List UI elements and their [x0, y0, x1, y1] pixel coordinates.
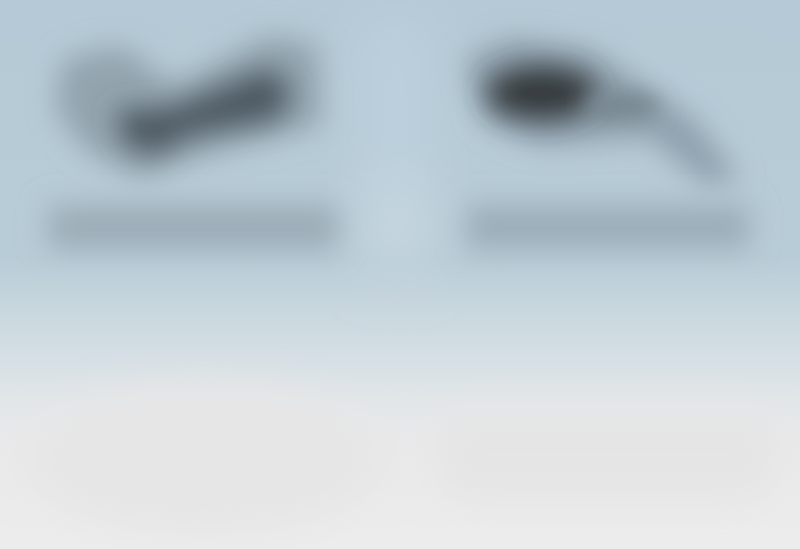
- left shape core: [115, 68, 292, 155]
- left shape halo: [55, 35, 322, 178]
- left dark shape: [55, 35, 322, 178]
- bottom left panel: [25, 385, 385, 535]
- bottom right panel: [440, 410, 775, 500]
- right shape core: [486, 66, 598, 120]
- right shape tail: [584, 93, 660, 119]
- central light column: [359, 20, 435, 275]
- left lower band: [48, 205, 338, 249]
- right shape halo: [465, 38, 740, 185]
- right lower band: [466, 205, 750, 249]
- right dark shape: [465, 38, 740, 185]
